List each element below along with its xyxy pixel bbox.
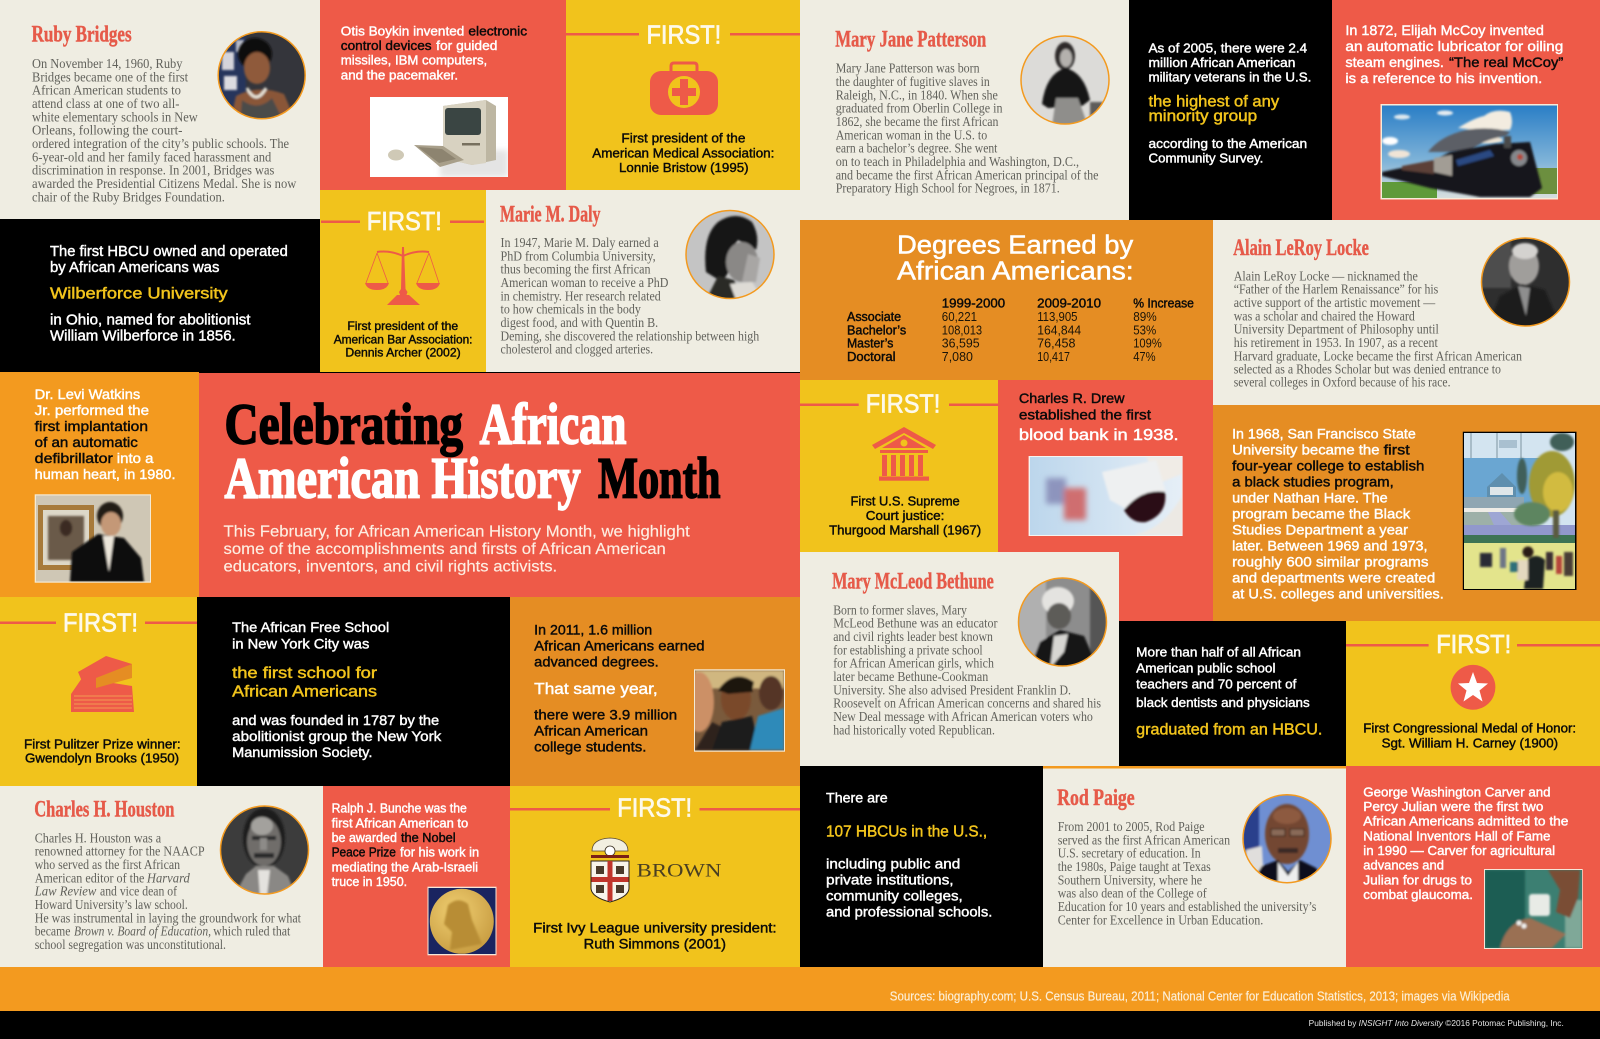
text: Elijah McCoy: In 1872, Elijah McCoy invented	[1345, 22, 1544, 38]
body text: Charles H. Houston: Harvard	[146, 870, 190, 885]
heading: Degrees Earned	[897, 229, 1134, 285]
title: Celebrating African American History Month: African	[480, 391, 626, 456]
text: Charles R. Drew: Charles R. Drew	[1019, 390, 1125, 406]
text: advanced degrees 2011: college students.	[534, 738, 646, 754]
table: degrees	[847, 297, 1194, 364]
text: African Free School: and was founded in 1787 by the	[232, 712, 439, 728]
text: Otis Boykin: and the pacemaker.	[341, 67, 458, 82]
text: Carver and Julian: George Washington Carver and	[1363, 784, 1550, 799]
text: Charles R. Drew	[1019, 390, 1179, 444]
text: Wilberforce University: by African Americans was	[50, 260, 219, 276]
body text: Alain LeRoy Locke: Harvard graduate, Locke became the first African American	[1234, 348, 1522, 363]
body text: Mary Jane Patterson: 1862, she became the first African	[836, 114, 999, 129]
caption: Dennis Archer	[334, 319, 472, 360]
panel: Alain LeRoy Locke	[1213, 220, 1600, 405]
logo: Brown University: BROWN	[637, 861, 722, 882]
panel: First Supreme Court justice	[800, 380, 998, 552]
table: degrees: 7,080	[942, 350, 973, 364]
caption: William H. Carney	[1363, 721, 1576, 750]
intro text: This February, for African American History Month, we highlight	[224, 524, 690, 541]
text: advanced degrees 2011: That same year,	[534, 681, 658, 698]
body text: Alain LeRoy Locke: selected as a Rhodes Scholar but was denied entrance to	[1234, 362, 1501, 377]
text: Carver and Julian: combat glaucoma.	[1363, 887, 1473, 902]
icon: courthouse	[872, 427, 936, 481]
table: degrees: 109%	[1133, 337, 1162, 351]
text: black studies program: University became the	[1232, 441, 1380, 457]
text: black studies program: a black studies program,	[1232, 473, 1394, 489]
table: degrees: Associate	[847, 310, 901, 324]
text: military veterans: the highest of any	[1148, 93, 1279, 110]
caption: Lonnie Bristow: Lonnie Bristow (1995)	[619, 160, 749, 175]
text: Ralph J. Bunche: first African American to	[332, 816, 468, 830]
text: black studies program: later. Between 1969 and 1973,	[1232, 537, 1428, 553]
panel: Rod Paige	[1043, 766, 1346, 967]
caption: Ruth Simmons: Ruth Simmons (2001)	[584, 936, 726, 952]
intro text	[224, 524, 690, 575]
body text: Marie M. Daly: American woman to receive a PhD	[500, 275, 669, 290]
text: Carver and Julian: in 1990 — Carver for agricultural	[1363, 843, 1555, 858]
table: degrees: Master’s	[847, 337, 893, 351]
text: advanced degrees 2011: there were 3.9 million	[534, 706, 677, 722]
body text: Alain LeRoy Locke: Alain LeRoy Locke — nicknamed the	[1234, 268, 1418, 283]
heading: Mary McLeod Bethune: Mary McLeod Bethune	[832, 568, 994, 594]
text: military veterans: according to the American	[1148, 136, 1307, 151]
photo: Dr. Levi Watkins	[35, 494, 151, 583]
body text: Marie M. Daly: Deming, she discovered the relationship between high	[500, 328, 759, 343]
body text: Ruby Bridges	[32, 56, 297, 204]
caption: Thurgood Marshall: Court justice:	[866, 508, 944, 523]
portrait: Mary Jane Patterson	[1021, 36, 1109, 126]
portrait: Alain LeRoy Locke	[1481, 238, 1570, 330]
text: black studies program: Studies Department a year	[1232, 521, 1408, 537]
body text: Marie M. Daly: cholesterol and clogged arteries.	[500, 342, 653, 357]
body text: Alain LeRoy Locke: was a scholar and chaired the Howard	[1234, 308, 1415, 323]
text: advanced degrees 2011: advanced degrees.	[534, 653, 659, 669]
text: Levi Watkins: into a	[117, 450, 154, 466]
text: black studies program: program became the Black	[1232, 505, 1411, 521]
photo: San Francisco State campus	[1463, 432, 1576, 590]
body text: Mary Jane Patterson: the daughter of fugitive slaves in	[836, 74, 990, 89]
text: Otis Boykin	[341, 23, 528, 82]
body text: Ruby Bridges: African American students to	[32, 83, 181, 98]
text: Wilberforce University: in Ohio, named for abolitionist	[50, 313, 250, 329]
heading: Alain LeRoy Locke: Alain LeRoy Locke	[1233, 235, 1369, 261]
text: Carver and Julian: National Inventors Hall of Fame	[1363, 828, 1550, 843]
body text: Ruby Bridges: Bridges became one of the first	[32, 69, 188, 84]
portrait: Mary McLeod Bethune	[1018, 578, 1107, 668]
body text: Rod Paige	[1058, 819, 1316, 927]
text: Levi Watkins: defibrillator	[35, 450, 113, 466]
text: Ralph J. Bunche: truce in 1950.	[332, 875, 407, 889]
title: Celebrating African American History Month	[224, 391, 720, 511]
icon: medical kit	[650, 63, 718, 115]
caption: William H. Carney: First Congressional Medal of Honor:	[1363, 721, 1576, 736]
body text: Ruby Bridges: 6-year-old and her family faced harassment and	[32, 149, 272, 164]
text: Carver and Julian: Percy Julian were the first two	[1363, 799, 1543, 814]
text: Wilberforce University: The first HBCU owned and operated	[50, 244, 288, 260]
portrait: Charles H. Houston	[220, 806, 309, 896]
text: Elijah McCoy	[1345, 22, 1564, 86]
panel: First Medal of Honor	[1346, 621, 1600, 766]
table: degrees: 2009-2010	[1037, 297, 1101, 311]
text: Wilberforce University: Wilberforce University	[50, 286, 228, 303]
body text: Charles H. Houston: American editor of the	[35, 870, 144, 885]
heading: Mary Jane Patterson: Mary Jane Patterson	[835, 27, 986, 53]
caption: Dennis Archer: First president of the	[347, 319, 458, 333]
body text: Marie M. Daly: thus becoming the first African	[500, 262, 651, 277]
panel: Mary McLeod Bethune	[800, 552, 1119, 766]
photo: pills in hand	[1484, 869, 1583, 949]
body text: Charles H. Houston: renowned attorney for the NAACP	[35, 844, 205, 859]
text: military veterans: As of 2005, there were 2.4	[1148, 40, 1307, 55]
caption: Thurgood Marshall: First U.S. Supreme	[850, 493, 960, 508]
body text: Mary McLeod Bethune: later became Bethune-Cookman	[833, 669, 989, 684]
panel: Levi Watkins	[0, 372, 199, 597]
text: Ralph J. Bunche: be awarded	[332, 831, 397, 845]
text: Levi Watkins	[35, 386, 176, 482]
text: Elijah McCoy: “The real McCoy”	[1449, 54, 1564, 70]
panel: 107 HBCUs	[800, 766, 1043, 967]
body text: Marie M. Daly: In 1947, Marie M. Daly earned a	[500, 235, 659, 250]
body text: Charles H. Houston: Law Review	[34, 884, 96, 899]
body text: Alain LeRoy Locke	[1234, 268, 1522, 390]
panel: First ABA president	[320, 190, 486, 372]
icon: star	[1451, 665, 1495, 710]
body text: Ruby Bridges: white elementary schools in New	[32, 109, 198, 124]
panel: Ralph J. Bunche	[323, 786, 510, 967]
intro text: some of the accomplishments and firsts of African American	[224, 541, 666, 558]
text: Levi Watkins: of an automatic	[35, 434, 138, 450]
text: military veterans: Community Survey.	[1148, 151, 1263, 166]
body text: Marie M. Daly: in chemistry. Her research related	[500, 288, 661, 303]
icon: books	[71, 656, 134, 712]
caption: Gwendolyn Brooks: Gwendolyn Brooks (1950)	[25, 752, 179, 766]
panel: black studies program	[1213, 405, 1600, 621]
panel: Charles H. Houston	[0, 786, 323, 967]
text: Otis Boykin: control devices	[341, 38, 432, 53]
table: degrees: 1999-2000	[942, 297, 1005, 311]
text: African Free School: in New York City was	[232, 635, 369, 651]
table: degrees: Doctoral	[847, 350, 896, 364]
photo: vintage computer	[370, 97, 508, 177]
body text: Charles H. Houston: which ruled that	[213, 924, 291, 939]
body text: Mary McLeod Bethune: University. She also advised President Franklin D.	[833, 682, 1071, 697]
heading: Degrees Earned: African Americans:	[897, 255, 1134, 285]
body text: Mary McLeod Bethune: for establishing a private school	[833, 642, 983, 657]
caption: Dennis Archer: Dennis Archer (2002)	[345, 346, 461, 360]
heading: Charles H. Houston: Charles H. Houston	[34, 797, 175, 823]
text: military veterans: military veterans in the U.S.	[1148, 70, 1311, 85]
text: Carver and Julian: advances and	[1363, 858, 1444, 873]
text: black studies program: and departments were created	[1232, 569, 1435, 585]
body text: Marie M. Daly: PhD from Columbia University,	[500, 248, 656, 263]
text: 107 HBCUs: and professional schools.	[826, 903, 992, 919]
panel: title	[199, 373, 800, 597]
body text: Mary Jane Patterson: Preparatory High School for Negroes, in 1871.	[836, 181, 1060, 196]
table: degrees: 60,221	[942, 310, 977, 324]
body text: Rod Paige: was also dean of the College of	[1058, 886, 1207, 901]
text: Levi Watkins: human heart, in 1980.	[35, 466, 176, 482]
panel: publisher bar	[0, 1011, 1600, 1039]
body text: Alain LeRoy Locke: his retirement in 1953. In 1907, as a recent	[1234, 335, 1438, 350]
body text: Charles H. Houston: and vice dean of	[100, 884, 177, 899]
body text: Alain LeRoy Locke: active support of the artistic movement —	[1234, 295, 1436, 310]
body text: Mary McLeod Bethune: for African American girls, which	[833, 656, 994, 671]
body text: Rod Paige: Southern University, where he	[1058, 872, 1202, 887]
body text: Charles H. Houston: He was instrumental in laying the groundwork for what	[35, 910, 301, 925]
body text: Mary McLeod Bethune: McLeod Bethune was an educator	[833, 616, 998, 631]
text: Ralph J. Bunche: for his work in	[400, 846, 479, 860]
text: Charles R. Drew: blood bank in 1938.	[1019, 427, 1179, 444]
text: Elijah McCoy: is a reference to his invention.	[1345, 70, 1542, 86]
table: degrees: 10,417	[1037, 350, 1070, 364]
text: military veterans: minority group	[1148, 108, 1257, 125]
text: 107 HBCUs: community colleges,	[826, 887, 963, 903]
text: HBCU graduates	[1136, 645, 1322, 739]
text: black studies program	[1232, 425, 1444, 601]
body text: Rod Paige: U.S. secretary of education. In	[1058, 846, 1201, 861]
logo: Brown University	[591, 838, 722, 902]
panel: sources footer	[0, 967, 1600, 1011]
heading: Rod Paige: Rod Paige	[1057, 785, 1135, 811]
text: Carver and Julian: African Americans admitted to the	[1363, 814, 1568, 829]
text: Ralph J. Bunche: Peace Prize	[332, 846, 396, 860]
caption: William H. Carney: Sgt. William H. Carney (1900)	[1382, 735, 1558, 750]
heading: Ruby Bridges: Ruby Bridges	[32, 22, 132, 48]
body text: Charles H. Houston: Brown v. Board of Education,	[74, 924, 211, 939]
text: advanced degrees 2011: African Americans earned	[534, 637, 705, 653]
photo: blood bag	[1029, 456, 1183, 536]
panel: Carver and Julian	[1346, 766, 1600, 967]
panel: First AMA president	[566, 0, 800, 190]
body text: Mary Jane Patterson: graduated from Oberlin College in	[836, 101, 1003, 116]
text: Ralph J. Bunche: mediating the Arab-Israeli	[332, 860, 478, 874]
caption: Ruth Simmons: First Ivy League university president:	[533, 919, 777, 935]
table: degrees: % Increase	[1133, 297, 1194, 311]
body text: Ruby Bridges: discrimination in response. In 2001, Bridges was	[32, 163, 274, 178]
body text: Charles H. Houston: became	[35, 924, 70, 939]
intro text: educators, inventors, and civil rights activists.	[224, 558, 557, 575]
caption: Thurgood Marshall: Thurgood Marshall (1967)	[829, 523, 981, 538]
body text: Mary McLeod Bethune	[833, 602, 1101, 737]
text: Charles R. Drew: established the first	[1019, 406, 1151, 422]
body text: Rod Paige: Education for 10 years and established the university’s	[1058, 899, 1316, 914]
text: black studies program: In 1968, San Francisco State	[1232, 425, 1416, 441]
title: Celebrating African American History Month: American History	[224, 446, 581, 511]
photo: Nobel medal	[428, 887, 496, 955]
body text: Mary McLeod Bethune: and civil rights leader best known	[833, 629, 993, 644]
text: Ralph J. Bunche	[332, 802, 479, 889]
text: black studies program: under Nathan Hare. The	[1232, 489, 1388, 505]
caption: Lonnie Bristow	[592, 131, 774, 175]
panel: Charles R. Drew	[998, 380, 1213, 621]
text: military veterans: million African American	[1148, 55, 1295, 70]
table: degrees: 164,844	[1037, 323, 1081, 337]
text: 107 HBCUs	[826, 789, 992, 919]
body text: Alain LeRoy Locke: several colleges in Oxford because of his race.	[1234, 375, 1450, 390]
panel: Otis Boykin	[320, 0, 566, 190]
text: HBCU graduates: More than half of all African	[1136, 645, 1301, 660]
body text: Mary Jane Patterson: on to teach in Philadelphia and Washington, D.C.,	[836, 154, 1079, 169]
caption: Lonnie Bristow: American Medical Association:	[592, 145, 774, 160]
panel: Mary Jane Patterson	[800, 0, 1129, 220]
table: degrees: 89%	[1133, 310, 1157, 324]
body text: Mary McLeod Bethune: New Deal message with African American voters who	[833, 709, 1093, 724]
text: Elijah McCoy: an automatic lubricator for oiling	[1345, 38, 1563, 54]
panel: advanced degrees 2011	[510, 597, 800, 786]
body text: Charles H. Houston: Charles H. Houston was a	[35, 830, 161, 845]
body text: Mary McLeod Bethune: Born to former slaves, Mary	[833, 602, 967, 617]
heading: Marie M. Daly: Marie M. Daly	[500, 202, 601, 228]
text: publisher credit: Published by INSIGHT Into Diversity ©2016 Potomac Publishing, Inc.	[1309, 1019, 1564, 1028]
table: degrees: 113,905	[1037, 310, 1078, 324]
text: advanced degrees 2011: African American	[534, 722, 648, 738]
body text: Mary Jane Patterson: and became the first African American principal of the	[836, 167, 1099, 182]
panel: first HBCU	[0, 219, 320, 372]
body text: Alain LeRoy Locke: “Father of the Harlem Renaissance” for his	[1234, 282, 1438, 297]
table: degrees: 47%	[1133, 350, 1156, 364]
photo: steam locomotive	[1380, 104, 1558, 200]
body text: Mary Jane Patterson: Mary Jane Patterson was born	[836, 61, 980, 76]
body text: Ruby Bridges: ordered integration of the city’s public schools. The	[32, 136, 289, 151]
text: Otis Boykin: Otis Boykin invented	[341, 23, 464, 38]
body text: Ruby Bridges: attend class at one of two all-	[32, 96, 179, 111]
portrait: Marie M. Daly	[686, 210, 774, 300]
body text: Marie M. Daly	[500, 235, 759, 357]
text: African Free School: abolitionist group the New York	[232, 728, 442, 744]
table: degrees: Bachelor’s	[847, 323, 906, 337]
body text: Mary Jane Patterson: American woman in the U.S. to	[836, 127, 987, 142]
text: 107 HBCUs: private institutions,	[826, 871, 954, 887]
text: black studies program: roughly 600 similar programs	[1232, 553, 1428, 569]
body text: Marie M. Daly: digest food, and with Quentin B.	[500, 315, 658, 330]
table: degrees: 76,458	[1037, 337, 1076, 351]
body text: Charles H. Houston: Howard University’s law school.	[35, 897, 188, 912]
text: black studies program: four-year college to establish	[1232, 457, 1424, 473]
panel: Marie M. Daly	[486, 190, 800, 372]
text: Carver and Julian: Julian for drugs to	[1363, 872, 1472, 887]
panel: military veterans	[1129, 0, 1332, 220]
panel: African Free School	[197, 597, 510, 786]
body text: Mary McLeod Bethune: had historically voted Republican.	[833, 722, 995, 737]
title: Celebrating African American History Month: Celebrating	[224, 391, 463, 456]
caption: Gwendolyn Brooks	[24, 738, 181, 766]
body text: Mary Jane Patterson	[836, 61, 1099, 196]
heading: Degrees Earned: Degrees Earned by	[897, 229, 1133, 259]
body text: Marie M. Daly: to how chemicals in the body	[500, 302, 641, 317]
body text: Mary Jane Patterson: Raleigh, N.C., in 1840. When she	[836, 87, 998, 102]
text: African Free School: the first school for	[232, 665, 377, 682]
text: Otis Boykin: for guided	[436, 38, 497, 53]
text: African Free School	[232, 619, 442, 760]
table: degrees: 108,013	[942, 323, 982, 337]
heading: FIRST!: FIRST!	[646, 19, 721, 49]
heading: FIRST!: FIRST!	[866, 389, 940, 419]
photo: college students	[684, 669, 785, 752]
table: degrees: 53%	[1133, 323, 1156, 337]
panel: First Ivy League president	[510, 786, 800, 967]
panel: First Pulitzer winner	[0, 597, 197, 786]
caption: Gwendolyn Brooks: First Pulitzer Prize winner:	[24, 738, 181, 752]
body text: Rod Paige: the 1980s, Paige taught at Texas	[1058, 859, 1211, 874]
text: black studies program: first	[1384, 441, 1410, 457]
caption: Ruth Simmons	[533, 919, 777, 952]
text: 107 HBCUs: including public and	[826, 855, 960, 871]
body text: Rod Paige: Center for Excellence in Urban Education.	[1058, 912, 1263, 927]
body text: Ruby Bridges: awarded the Presidential Citizens Medal. She is now	[32, 176, 297, 191]
text: Ralph J. Bunche: Ralph J. Bunche was the	[332, 802, 467, 816]
text: Ralph J. Bunche: the Nobel	[401, 831, 456, 845]
text: Levi Watkins: Dr. Levi Watkins	[35, 386, 140, 402]
panel: Elijah McCoy	[1332, 0, 1600, 220]
body text: Charles H. Houston: school segregation was unconstitutional.	[35, 937, 226, 952]
text: advanced degrees 2011	[534, 621, 705, 754]
body text: Ruby Bridges: On November 14, 1960, Ruby	[32, 56, 183, 71]
text: sources: Sources: biography.com; U.S. Census Bureau, 2011; National Center for Education Statistics, 2013; images via Wikipedia	[890, 990, 1510, 1004]
text: African Free School: Manumission Society.	[232, 744, 372, 760]
text: HBCU graduates: graduated from an HBCU.	[1136, 722, 1322, 739]
text: Levi Watkins: Jr. performed the	[35, 402, 149, 418]
text: HBCU graduates: black dentists and physicians	[1136, 695, 1310, 710]
text: Carver and Julian	[1363, 784, 1568, 902]
panel: HBCU graduates	[1119, 621, 1346, 766]
text: Levi Watkins: first implantation	[35, 418, 148, 434]
text: HBCU graduates: American public school	[1136, 661, 1276, 676]
text: military veterans	[1148, 40, 1311, 166]
portrait: Ruby Bridges	[218, 31, 306, 122]
panel: Ruby Bridges	[0, 0, 320, 219]
heading: FIRST!: FIRST!	[617, 793, 692, 823]
body text: Ruby Bridges: Orleans, following the court-	[32, 123, 182, 138]
text: HBCU graduates: teachers and 70 percent of	[1136, 677, 1297, 692]
body text: Rod Paige: served as the first African American	[1058, 832, 1230, 847]
heading: FIRST!: FIRST!	[63, 608, 138, 638]
text: Elijah McCoy: steam engines.	[1345, 54, 1444, 70]
caption: Thurgood Marshall	[829, 493, 981, 538]
text: advanced degrees 2011: In 2011, 1.6 million	[534, 621, 652, 637]
body text: Charles H. Houston	[34, 830, 301, 952]
panel: Degrees Earned	[800, 220, 1213, 380]
icon: scales of justice	[365, 247, 440, 305]
text: African Free School: African Americans	[232, 684, 377, 701]
body text: Charles H. Houston: who served as the first African	[35, 857, 180, 872]
text: black studies program: at U.S. colleges and universities.	[1232, 585, 1444, 601]
text: 107 HBCUs: 107 HBCUs in the U.S.,	[826, 824, 987, 841]
portrait: Rod Paige	[1243, 794, 1332, 885]
text: Otis Boykin: electronic	[468, 23, 528, 38]
heading: FIRST!: FIRST!	[367, 206, 442, 236]
table: degrees: 36,595	[942, 337, 980, 351]
heading: FIRST!: FIRST!	[1436, 629, 1511, 659]
text: Wilberforce University: William Wilberforce in 1856.	[50, 329, 236, 345]
text: African Free School: The African Free School	[232, 619, 389, 635]
body text: Ruby Bridges: chair of the Ruby Bridges Foundation.	[32, 189, 225, 204]
caption: Dennis Archer: American Bar Association:	[334, 332, 472, 346]
title: Celebrating African American History Month: Month	[598, 446, 720, 511]
body text: Mary McLeod Bethune: Roosevelt on African American concerns and shared his	[833, 696, 1101, 711]
body text: Alain LeRoy Locke: University Department of Philosophy until	[1234, 322, 1439, 337]
caption: Lonnie Bristow: First president of the	[621, 131, 745, 146]
text: Otis Boykin: missiles, IBM computers,	[341, 53, 487, 68]
text: Wilberforce University	[50, 244, 288, 345]
body text: Rod Paige: From 2001 to 2005, Rod Paige	[1058, 819, 1205, 834]
text: 107 HBCUs: There are	[826, 789, 888, 805]
body text: Mary Jane Patterson: earn a bachelor’s degree. She went	[836, 141, 998, 156]
